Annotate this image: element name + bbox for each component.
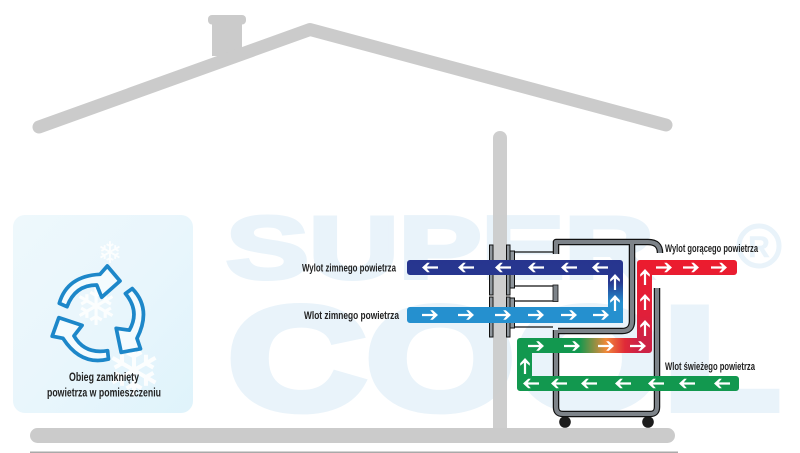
wheels	[559, 416, 654, 428]
panel caption	[47, 372, 161, 400]
duct: hot air outlet (red)	[637, 260, 737, 353]
duct: cold air inlet (light blue)	[407, 285, 623, 323]
panel background	[13, 215, 193, 413]
watermark word COOL: COOL	[228, 277, 780, 440]
watermark registered mark	[739, 226, 779, 266]
panel caption: powietrza w pomieszczeniu	[47, 388, 161, 400]
watermark word SUPER: SUPER	[226, 198, 654, 297]
air conditioner unit	[490, 242, 660, 428]
duct: cold air outlet (dark blue)	[407, 260, 623, 323]
icon: snowflakes: ❄	[106, 334, 162, 410]
duct: fresh air inlet (green)	[517, 338, 739, 391]
label: fresh air inlet: Wlot świeżego powietrza	[665, 361, 756, 373]
icon: three circular arrows	[46, 266, 165, 378]
watermark registered mark: R	[748, 231, 770, 264]
panel caption: Obieg zamknięty	[69, 372, 139, 384]
interior wall	[493, 138, 507, 436]
label: cold air inlet: Wlot zimnego powietrza	[304, 310, 400, 322]
duct: heat exchange section (green to red)	[580, 338, 638, 353]
connecting pipes	[515, 252, 553, 327]
icon: snowflakes: ❄	[74, 279, 118, 337]
flow arrows: cold air inlet	[422, 310, 609, 320]
label: hot air outlet: Wylot gorącego powietrza	[665, 243, 759, 255]
icon: snowflakes	[74, 237, 162, 410]
chimney	[208, 15, 246, 56]
house outline	[30, 15, 678, 453]
icon: snowflakes: ❄	[97, 237, 123, 270]
watermark: SUPER COOL logo	[226, 198, 780, 440]
ground line	[30, 452, 678, 453]
roof	[39, 30, 666, 127]
wall plates	[490, 245, 514, 337]
floor	[30, 428, 675, 443]
label: cold air outlet: Wylot zimnego powietrza	[302, 262, 397, 274]
device casing outline	[556, 242, 660, 414]
flow arrows: fresh air	[520, 341, 730, 388]
flow arrows: hot air	[640, 263, 727, 336]
flow arrows: cold air outlet	[422, 263, 620, 311]
panel: closed air circulation	[13, 215, 193, 413]
